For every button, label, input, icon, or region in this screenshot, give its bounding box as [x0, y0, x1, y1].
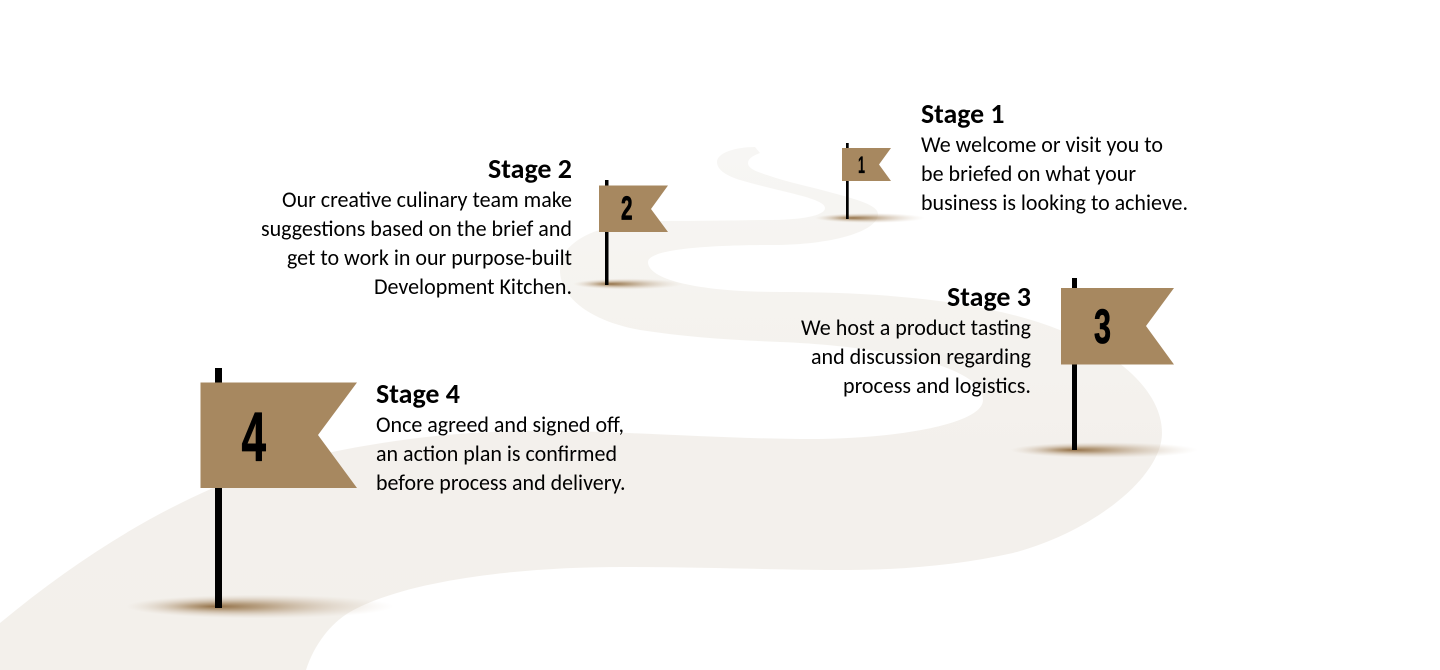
stage 3 body: and discussion regarding [811, 343, 1031, 371]
flag 2 marker [573, 180, 683, 290]
stage 3 text [801, 281, 1031, 400]
number 1: 1 [858, 152, 865, 179]
stage 1 body [921, 131, 1188, 217]
stage 4 body [376, 411, 626, 497]
pole 1 [846, 143, 849, 219]
stage 4 body: an action plan is confirmed [376, 440, 617, 468]
number 3: 3 [1094, 301, 1111, 354]
stage 2 body: get to work in our purpose-built [287, 244, 572, 272]
stage 3 body: We host a product tasting [801, 314, 1031, 342]
flag 1 marker [815, 143, 925, 223]
stage 2 body: suggestions based on the brief and [261, 215, 572, 243]
stage 2 body: Our creative culinary team make [282, 186, 572, 214]
number 4: 4 [242, 398, 266, 476]
stage 1 heading: Stage 1 [921, 98, 1004, 131]
stage 4 body: Once agreed and signed off, [376, 411, 624, 439]
pole 4 [215, 368, 222, 608]
shadow 1 [815, 213, 925, 223]
number 2: 2 [621, 190, 632, 226]
stage 4 body: before process and delivery. [376, 469, 626, 497]
flag 3 [1061, 288, 1174, 364]
stage 2 heading: Stage 2 [488, 153, 572, 186]
flag 4 [200, 382, 357, 488]
stage 4 text [376, 378, 626, 497]
shadow 4 [126, 594, 394, 618]
stage 2 body: Development Kitchen. [374, 273, 572, 301]
stage 1 body: We welcome or visit you to [921, 131, 1163, 159]
stage 4 heading: Stage 4 [376, 378, 460, 411]
pole 3 [1072, 278, 1077, 450]
flag 2 [599, 186, 668, 232]
pole 2 [605, 180, 608, 285]
flag 1 [842, 148, 891, 181]
stage 1 body: business is looking to achieve. [921, 189, 1188, 217]
stage 1 body: be briefed on what your [921, 160, 1136, 188]
stage 2 text [261, 153, 572, 301]
stage 3 heading: Stage 3 [947, 281, 1031, 314]
stage 3 body: process and logistics. [843, 372, 1031, 400]
shadow 3 [1010, 442, 1198, 458]
stage 3 body [801, 314, 1031, 400]
stage 1 text [921, 98, 1188, 217]
flag 3 marker [1010, 278, 1198, 458]
flag 4 marker [126, 368, 394, 618]
shadow 2 [573, 278, 683, 290]
stage 2 body [261, 186, 572, 301]
winding road [0, 147, 1162, 670]
